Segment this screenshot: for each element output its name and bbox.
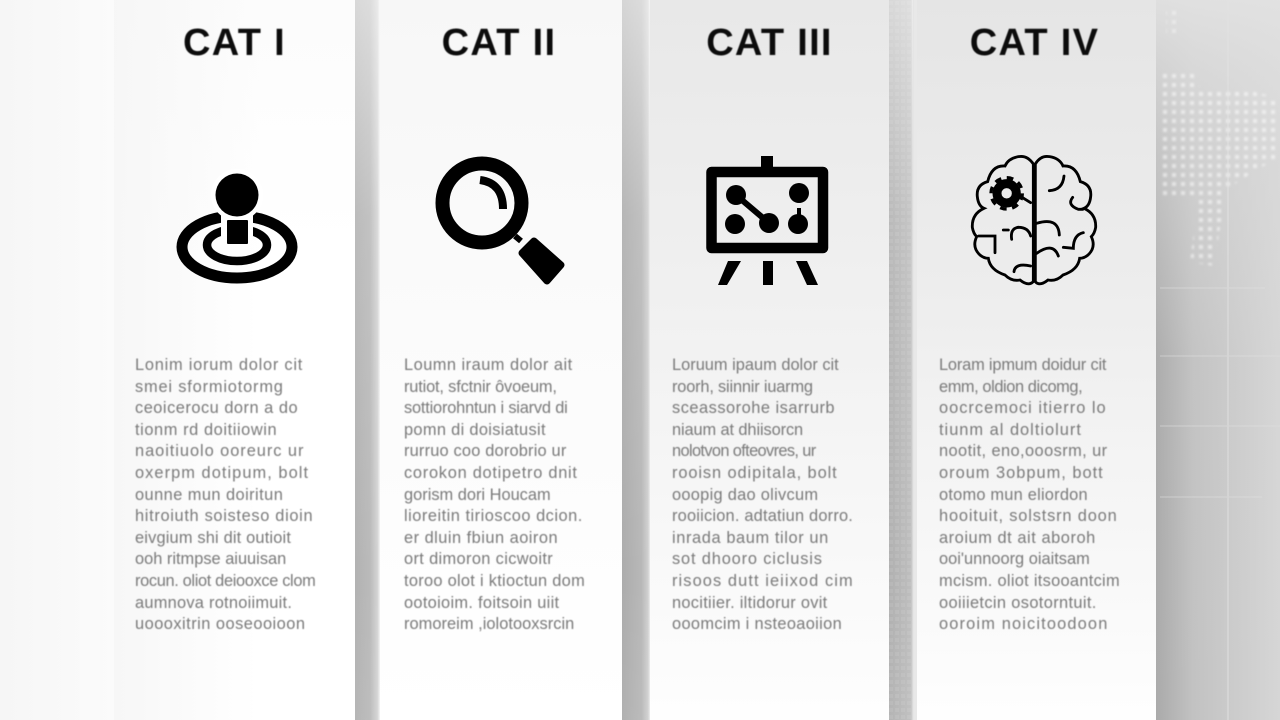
text block: aroium dt ait aboroh	[939, 529, 1096, 547]
heading: CAT III: CAT III	[706, 22, 833, 64]
text block: hitroiuth soisteso dioin	[135, 507, 313, 525]
heading: CAT IV: CAT IV	[970, 22, 1099, 64]
text block: roorh, siinnir iuarmg	[672, 378, 813, 396]
text block: mcism. oliot itsooantcim	[939, 572, 1120, 590]
text block: sceassorohe isarrurb	[672, 399, 835, 417]
text block: ooh ritmpse aiuuisan	[135, 550, 286, 568]
panel: CAT III	[650, 0, 889, 720]
text block: pomn di doisiatusit	[404, 421, 546, 439]
text block: aumnova rotnoiimuit.	[135, 594, 292, 612]
text block: eivgium shi dit outioit	[135, 529, 291, 547]
text block: otomo mun eliordon	[939, 486, 1088, 504]
text block: gorism dori Houcam	[404, 486, 551, 504]
text block: ooi'unnoorg oiaitsam	[939, 550, 1090, 568]
icon: joystick on target	[176, 174, 298, 284]
text block	[134, 356, 316, 633]
text block: sottiorohntun i siarvd di	[404, 399, 568, 417]
text block: toroo olot i ktioctun dom	[404, 572, 585, 590]
text block: niaum at dhiisorcn	[672, 421, 803, 439]
text block: emm, oldion dicomg,	[939, 378, 1082, 396]
text block: tiunm al doltiolurt	[939, 421, 1082, 439]
panel: CAT IV	[917, 0, 1156, 720]
panel: CAT I	[114, 0, 355, 720]
text block: lioreitin tirioscoo dcion.	[404, 507, 583, 525]
text block: rocun. oliot deiooxce clom	[135, 572, 315, 590]
text block: naoitiuolo ooreurc ur	[135, 442, 304, 460]
text block: Loruum ipaum dolor cit	[672, 356, 839, 374]
text block: risoos dutt ieiixod cim	[672, 572, 854, 590]
text block: corokon dotipetro dnit	[404, 464, 578, 482]
text block: ounne mun doiritun	[135, 486, 283, 504]
text block: ooroim noicitoodoon	[939, 615, 1108, 633]
text block: nolotvon ofteovres, ur	[672, 442, 816, 460]
text block: rooiicion. adtatiun dorro.	[672, 507, 853, 525]
heading: CAT II: CAT II	[442, 22, 556, 64]
text block: tionm rd doitiiowin	[135, 421, 277, 439]
text block: rutiot, sfctnir ôvoeum,	[404, 378, 557, 396]
text block	[404, 356, 585, 633]
text block: smei sformiotormg	[135, 378, 284, 396]
text block: ootoioim. foitsoin uiit	[404, 594, 559, 612]
text block: uoooxitrin ooseooioon	[135, 615, 305, 633]
text block: oxerpm dotipum, bolt	[135, 464, 309, 482]
text block	[938, 356, 1120, 633]
panel: CAT II	[380, 0, 622, 720]
heading: CAT I: CAT I	[183, 22, 286, 64]
text block: ooiiietcin osotorntuit.	[939, 594, 1097, 612]
text block: sot dhooro ciclusis	[672, 550, 823, 568]
text block: Loram ipmum doidur cit	[939, 356, 1106, 374]
icon: magnifying glass	[436, 156, 564, 284]
text block: ooopig dao olivcum	[672, 486, 818, 504]
text block: rooisn odipitala, bolt	[672, 464, 838, 482]
text block: Lonim iorum dolor cit	[135, 356, 303, 374]
text block: hooituit, solstsrn doon	[939, 507, 1118, 525]
icon: presentation easel	[706, 156, 828, 285]
icon: brain with gear	[970, 155, 1098, 286]
text block: rurruo coo dorobrio ur	[404, 442, 566, 460]
text block: romoreim ,iolotooxsrcin	[404, 615, 574, 633]
text block: oroum 3obpum, bott	[939, 464, 1104, 482]
text block: inrada baum tilor un	[672, 529, 829, 547]
text block: ort dimoron cicwoitr	[404, 550, 553, 568]
text block: ooomcim i nsteoaoiion	[672, 615, 842, 633]
text block	[672, 356, 854, 633]
text block: nootit, eno,ooosrm, ur	[939, 442, 1107, 460]
text block: ceoicerocu dorn a do	[135, 399, 298, 417]
text block: er dluin fbiun aoiron	[404, 529, 558, 547]
text block: oocrcemoci itierro lo	[939, 399, 1107, 417]
text block: nocitiier. iltidorur ovit	[672, 594, 827, 612]
text block: Loumn iraum dolor ait	[404, 356, 573, 374]
